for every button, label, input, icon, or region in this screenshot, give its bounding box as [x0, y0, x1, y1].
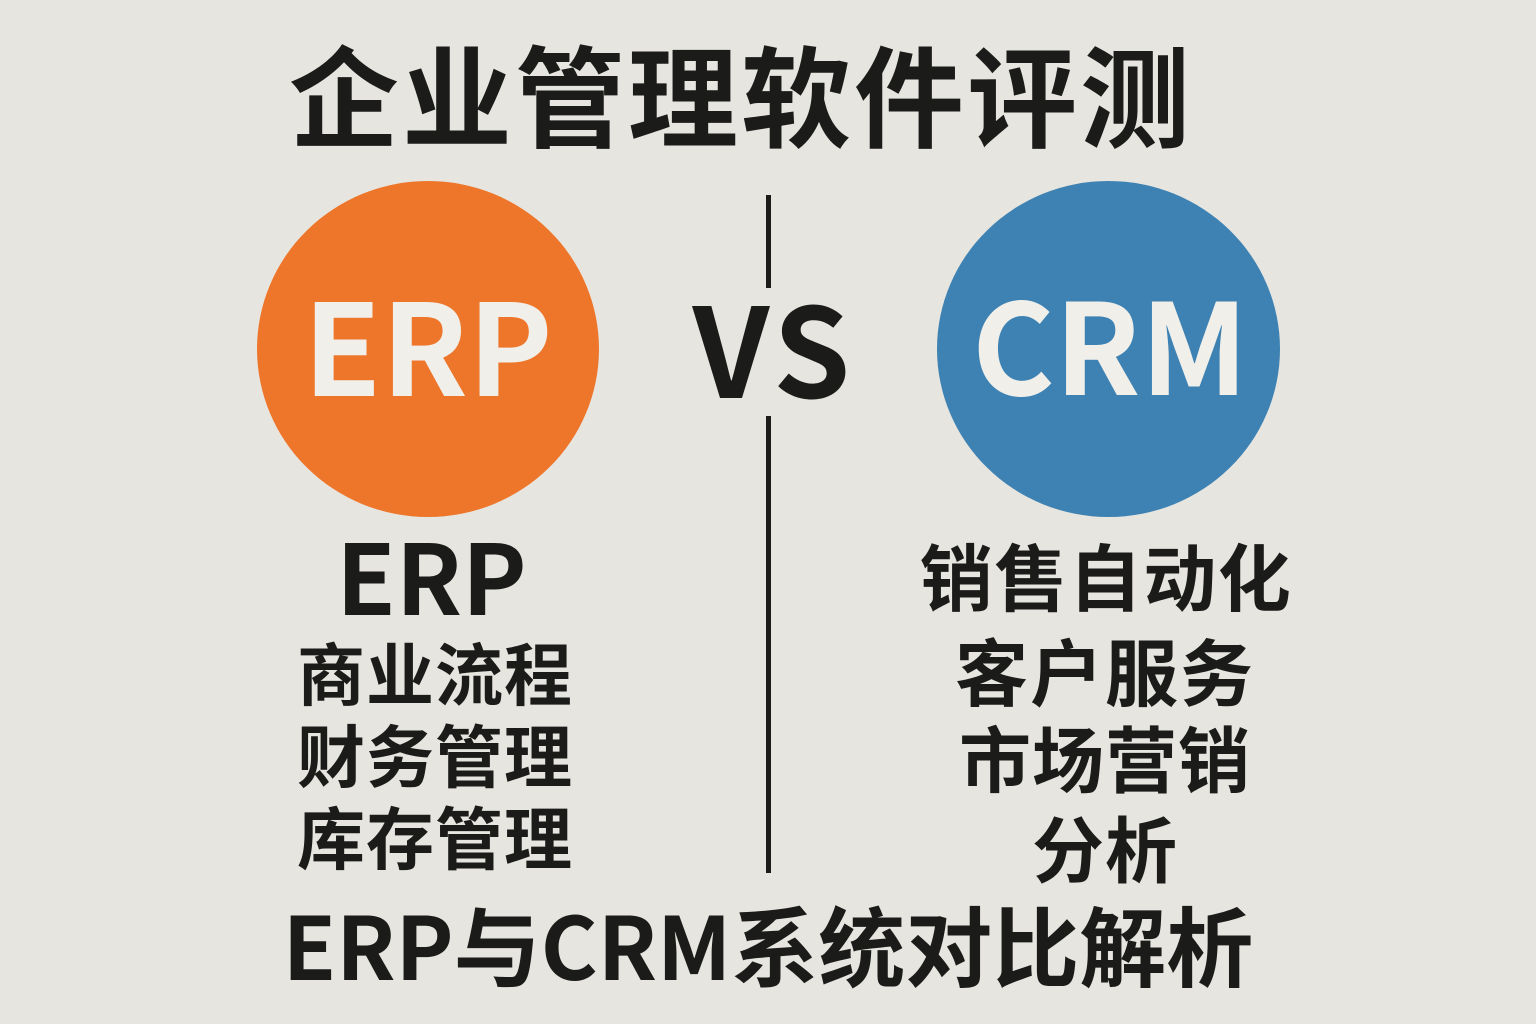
title: 企业管理软件评测 — [289, 11, 1193, 171]
panel: CRM circle — [937, 181, 1280, 517]
divider line top — [766, 195, 771, 288]
panel: ERP features — [297, 502, 573, 884]
VS label: VS — [693, 254, 855, 434]
feature: analytics: 分析 — [1032, 793, 1178, 898]
subtitle: ERP与CRM系统对比解析 — [283, 880, 1253, 1006]
ERP circle label: ERP — [303, 249, 553, 433]
feature: customer service: 客户服务 — [955, 616, 1255, 722]
feature: business process: 商业流程 — [297, 621, 573, 720]
divider line bottom — [766, 416, 771, 873]
panel: ERP circle — [257, 181, 599, 517]
feature: sales automation: 销售自动化 — [920, 521, 1292, 627]
CRM circle label: CRM — [972, 250, 1248, 432]
feature: inventory: 库存管理 — [297, 785, 573, 884]
feature: marketing: 市场营销 — [959, 703, 1251, 808]
feature: finance: 财务管理 — [297, 703, 573, 802]
ERP heading: ERP — [336, 502, 527, 643]
panel: CRM features — [920, 521, 1292, 898]
